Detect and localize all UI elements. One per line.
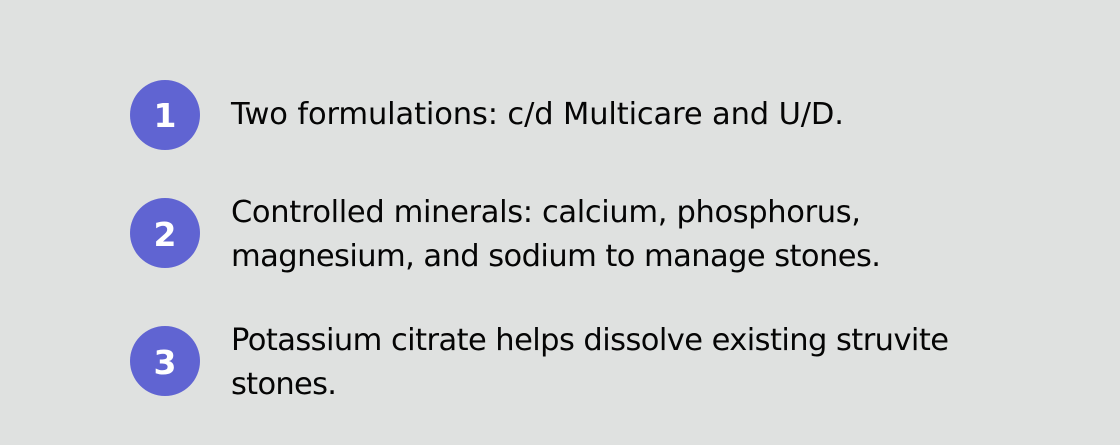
number badge 1 — [130, 80, 200, 150]
text: item 3: stones. — [231, 367, 337, 402]
text: item 2 — [231, 195, 881, 274]
number badge 2 — [130, 198, 200, 268]
text: item 3 — [231, 323, 949, 402]
number badge 3 — [130, 326, 200, 396]
text: item 1: Two formulations: c/d Multicare and U/D. — [230, 97, 844, 132]
number badge 1: 1 — [154, 96, 176, 135]
text: item 2: magnesium, and sodium to manage stones. — [231, 239, 881, 274]
number badge 2: 2 — [154, 215, 176, 254]
text: item 3: Potassium citrate helps dissolve existing struvite — [231, 323, 949, 358]
list item 2 — [130, 195, 881, 274]
list item 1 — [130, 80, 844, 150]
text: item 2: Controlled minerals: calcium, phosphorus, — [231, 195, 861, 230]
list item 3 — [130, 323, 949, 402]
number badge 3: 3 — [154, 343, 176, 382]
